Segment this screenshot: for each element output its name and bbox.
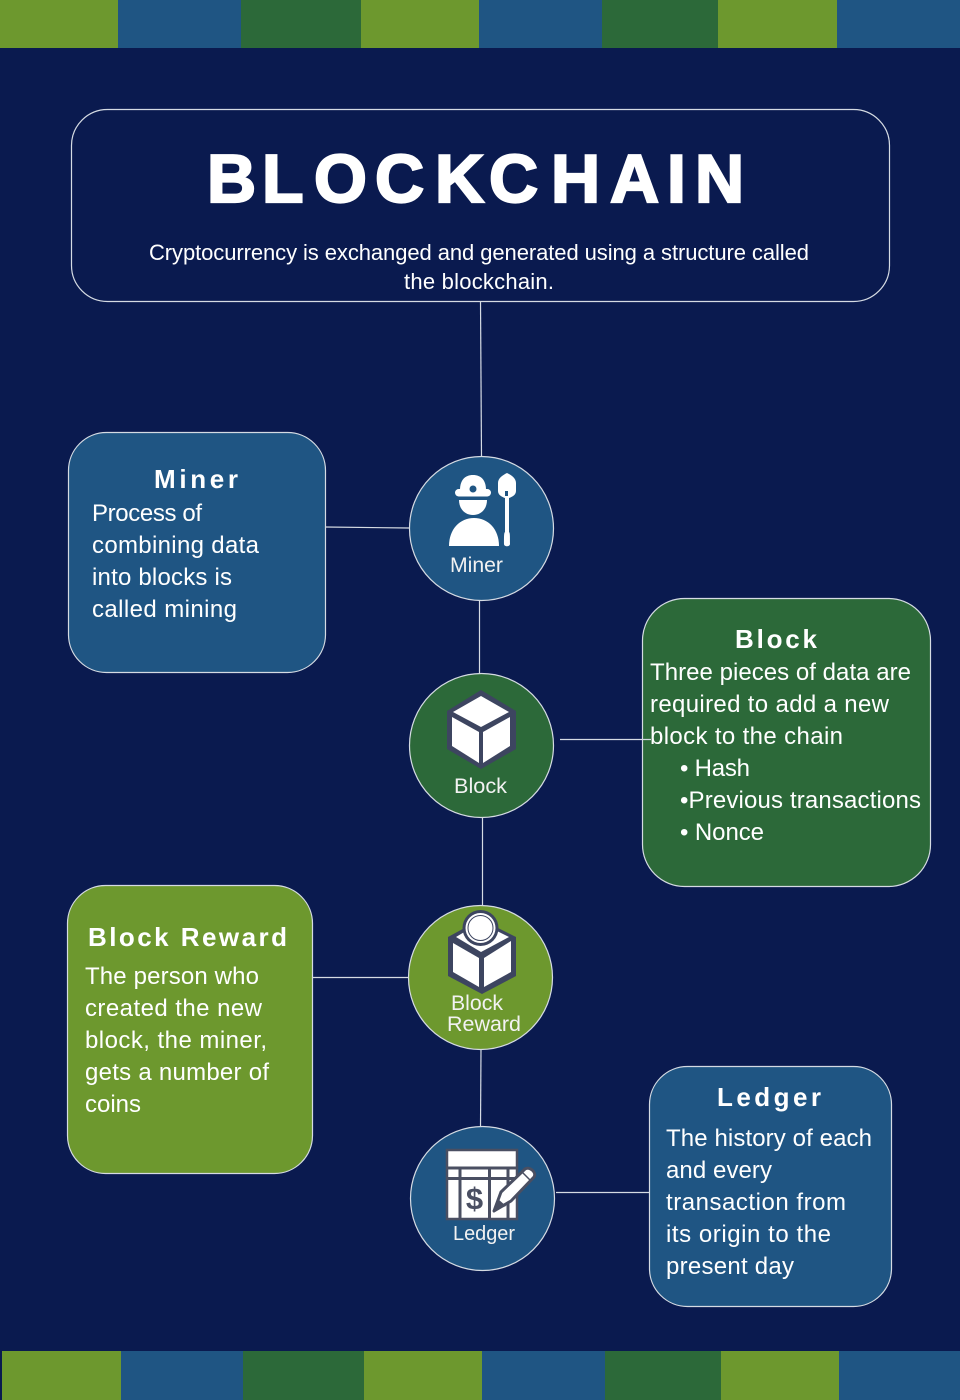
block reward heading: Block Reward [88,922,287,952]
node: block reward [408,906,552,1050]
block description [650,659,921,846]
ledger heading: Ledger [717,1082,821,1112]
subtitle: Cryptocurrency is exchanged and generated using a structure called [149,240,809,265]
block reward description: block, the miner, [85,1027,267,1054]
node: miner [410,456,554,600]
miner description: called mining [92,596,237,623]
node: block [410,674,554,818]
block description: •Previous transactions [680,787,921,814]
icon: ledger with pen [447,1150,535,1219]
ledger description: present day [666,1253,794,1280]
panel: block [642,598,930,886]
icon: cube [447,690,516,769]
block reward description [85,963,269,1118]
subtitle: the blockchain. [404,269,554,294]
miner description: into blocks is [92,564,232,591]
icon: miner with shovel [449,473,516,546]
miner heading: Miner [154,464,238,494]
ledger description: and every [666,1157,772,1184]
block heading: Block [735,624,818,654]
subtitle [149,240,809,294]
ledger description: The history of each [666,1125,872,1152]
ledger description: its origin to the [666,1221,831,1248]
node label: block reward: Block [451,992,503,1015]
block description: Three pieces of data are [650,659,911,686]
node: ledger [410,1126,554,1270]
node label: block reward [447,992,521,1036]
block description: • Nonce [680,819,764,846]
block reward description: created the new [85,995,263,1022]
ledger description [666,1125,872,1280]
panel: ledger [650,1066,892,1306]
block reward description: The person who [85,963,259,990]
bottom colour band [2,1351,960,1400]
block description: required to add a new [650,691,890,718]
miner description: Process of [92,500,202,527]
title: BLOCKCHAIN [207,141,744,217]
node label: ledger: Ledger [453,1223,515,1245]
miner description [92,500,260,623]
block reward description: coins [85,1091,141,1118]
block reward description: gets a number of [85,1059,269,1086]
panel: miner [68,432,326,672]
node label: miner: Miner [450,554,503,577]
block description: block to the chain [650,723,843,750]
title panel [72,110,890,302]
node label: block reward: Reward [447,1013,521,1036]
icon: ledger with pen: $ [466,1181,483,1216]
ledger description: transaction from [666,1189,846,1216]
top colour band [0,0,960,48]
miner description: combining data [92,532,260,559]
block description: • Hash [680,755,750,782]
node label: block: Block [454,775,508,798]
icon: cube with coin [448,910,516,994]
panel: block reward [68,886,312,1174]
